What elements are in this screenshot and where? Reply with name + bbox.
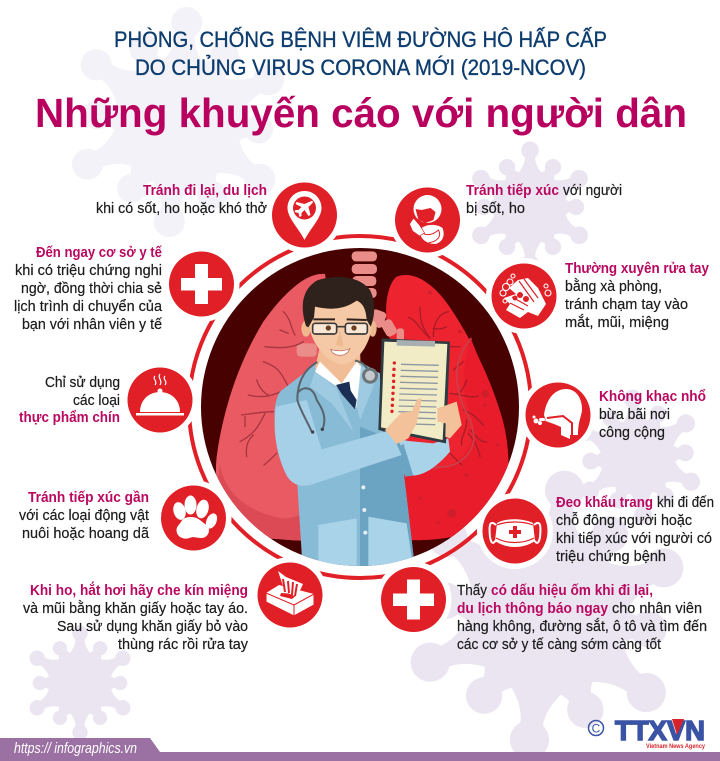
central illustration: doctor and lungs [201, 248, 519, 568]
text: cover mouth: và mũi bằng khăn giấy hoặc tay áo. [23, 600, 248, 617]
footer url: https:// infographics.vn [14, 740, 137, 757]
text: avoid contact: Tránh tiếp xúc [466, 183, 559, 199]
text: cooked food: Chỉ sử dụng [45, 375, 120, 391]
text: go to health facility: bạn với nhân viên y tế [22, 317, 162, 333]
icon halos [122, 177, 596, 638]
heading line 2: DO CHỦNG VIRUS CORONA MỚI (2019-NCOV) [135, 55, 586, 80]
title block [35, 26, 687, 136]
hands [385, 398, 422, 444]
right lung [386, 275, 509, 540]
icon: tissue box [258, 562, 322, 628]
icon: person coughing [395, 188, 460, 252]
left lung [216, 274, 326, 540]
text: avoid travel: khi có sốt, ho hoặc khó thở [96, 201, 267, 217]
text: wear mask: triệu chứng bệnh [556, 549, 666, 565]
shirt and tie [315, 362, 361, 408]
text: cover mouth [23, 581, 249, 653]
head [301, 321, 311, 337]
footer band [0, 738, 720, 761]
text: avoid animals: Tránh tiếp xúc gần [28, 490, 149, 506]
icon: washing hands [492, 264, 556, 328]
outer red ring [189, 236, 531, 578]
icon: medical cross right [381, 567, 446, 632]
text: report symptoms: có dấu hiệu ốm khi đi lại, [491, 583, 653, 599]
doctor coat [275, 362, 415, 568]
text: wash hands [565, 261, 709, 331]
text: go to health facility: khi có triệu chứng nghi [15, 263, 162, 279]
text: cover mouth: Sau sử dụng khăn giấy bỏ vào [57, 619, 248, 635]
text: report symptoms: các cơ sở y tế càng sớm càng tốt [457, 637, 661, 653]
text: report symptoms: Thấy [457, 583, 488, 599]
text: cooked food [19, 375, 120, 426]
text: report symptoms: du lịch thông báo ngay [457, 601, 608, 617]
icon: food cloche [128, 368, 192, 432]
icon: face mask [482, 498, 548, 564]
text: avoid animals [19, 490, 150, 542]
text: no spitting [599, 389, 706, 441]
neck [315, 349, 361, 387]
text: cooked food: các loại [73, 393, 120, 409]
text: no spitting: bừa bãi nơi [599, 407, 670, 423]
text: wear mask: chỗ đông người hoặc [556, 512, 692, 529]
logo: TTXVN [588, 715, 705, 750]
trachea [297, 251, 404, 357]
icon: medical cross left [169, 252, 234, 316]
text: avoid contact: với người [563, 183, 622, 199]
bronchi branches [240, 312, 303, 465]
text: no spitting: Không khạc nhổ [599, 389, 706, 405]
text: avoid animals: với các loại động vật [19, 508, 149, 524]
text: no spitting: công cộng [599, 425, 665, 441]
text: cover mouth: Khi ho, hắt hơi hãy che kín miệng [30, 581, 248, 599]
hair [303, 277, 374, 327]
text: wash hands: tránh chạm tay vào [565, 297, 688, 313]
text: wash hands: bằng xà phòng, [565, 278, 662, 295]
text: cooked food: thực phẩm chín [19, 410, 120, 426]
text: go to health facility: lịch trình di chuyển của [14, 299, 163, 315]
text: avoid travel: Tránh đi lại, du lịch [143, 183, 267, 199]
text: go to health facility: Đến ngay cơ sở y tế [36, 245, 163, 261]
glasses [313, 323, 367, 334]
clipboard [378, 338, 450, 443]
text: avoid contact [466, 183, 622, 217]
text: report symptoms: cho nhân viên [612, 601, 702, 617]
heading line 1: PHÒNG, CHỐNG BỆNH VIÊM ĐƯỜNG HÔ HẤP CẤP [114, 26, 607, 52]
text: report symptoms: hàng không, đường sắt, ô tô và tìm đến [457, 618, 707, 635]
text: avoid animals: nuôi hoặc hoang dã [22, 526, 150, 542]
text: wear mask: khi đi đến [657, 495, 714, 511]
coat lapels [310, 367, 377, 432]
text: wash hands: Thường xuyên rửa tay [565, 261, 709, 277]
text: avoid travel [96, 183, 267, 217]
text: go to health facility: ngờ, đồng thời chia sẻ [21, 281, 162, 297]
text: wash hands: mắt, mũi, miệng [565, 314, 669, 331]
text: go to health facility [14, 245, 163, 333]
text: avoid contact: bị sốt, ho [466, 201, 525, 217]
text: wear mask: khi tiếp xúc với người có [556, 531, 712, 547]
copyright symbol: C [592, 722, 601, 736]
stethoscope [297, 361, 368, 432]
text: wear mask [556, 495, 714, 565]
icon: paw print [161, 486, 226, 550]
agency tagline: Vietnam News Agency [646, 743, 705, 750]
main title: Những khuyến cáo với người dân [35, 90, 687, 136]
agency name: TTXVN [615, 715, 705, 746]
text: report symptoms [457, 583, 707, 653]
icon: travel location pin with plane [272, 182, 337, 248]
text: wear mask: Đeo khẩu trang [556, 495, 653, 511]
icon: head spitting [526, 382, 590, 448]
text: cover mouth: thùng rác rồi rửa tay [118, 637, 249, 653]
